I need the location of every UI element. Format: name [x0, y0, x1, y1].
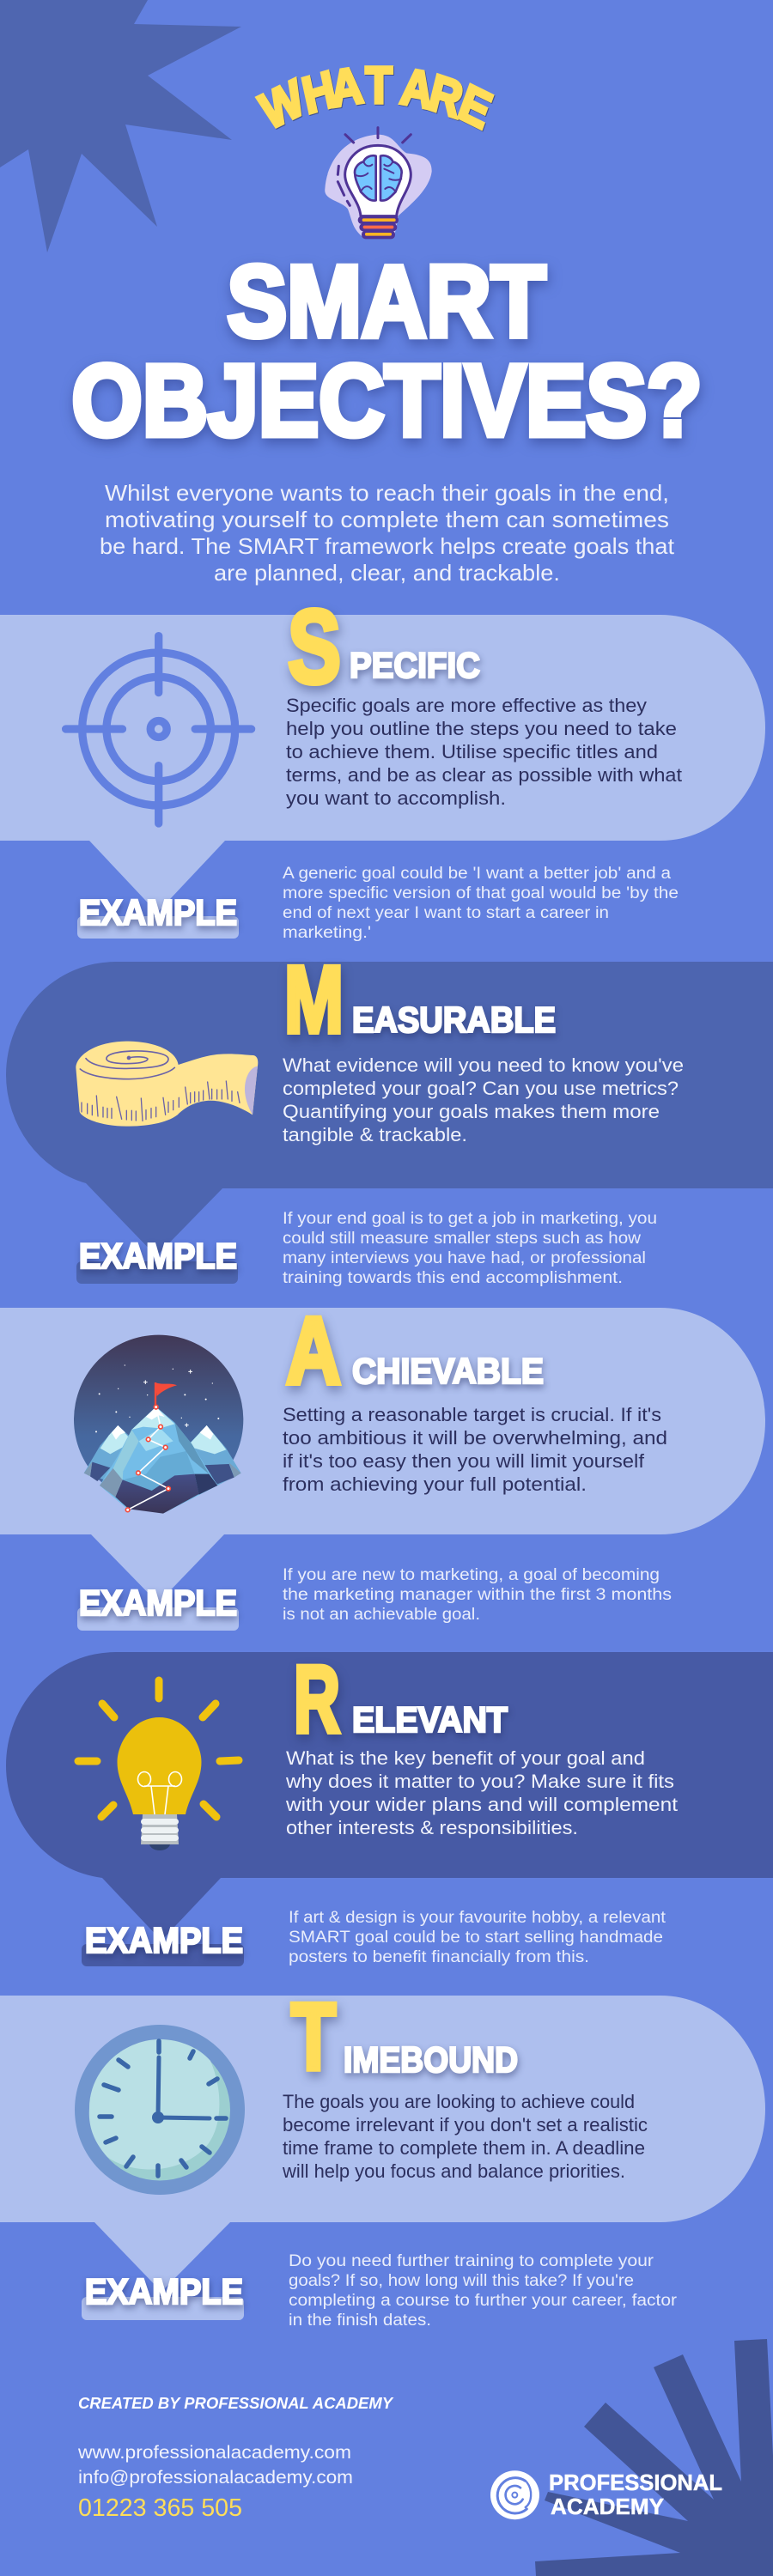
body text: timebound: The goals you are looking to achieve could	[283, 2091, 635, 2112]
speech bubble: timebound	[0, 1996, 765, 2292]
intro paragraph: are planned, clear, and trackable.	[214, 560, 560, 586]
icon: target	[66, 636, 252, 823]
panel: relevant	[6, 1647, 773, 1966]
decorative star top left	[0, 0, 241, 252]
body text: relevant: why does it matter to you? Make sure it fits	[285, 1771, 674, 1792]
example tag: timebound: EXAMPLE	[85, 2271, 243, 2312]
title: achievable: A	[286, 1298, 341, 1404]
example text: achievable: If you are new to marketing, a goal of becoming	[283, 1566, 660, 1584]
title: relevant: ELEVANT	[352, 1699, 508, 1740]
body text: achievable	[283, 1404, 667, 1495]
heading: what are: WHAT ARE	[253, 56, 499, 141]
email: info@professionalacademy.com	[78, 2468, 353, 2488]
panel: achievable	[0, 1298, 765, 1631]
example text: measurable: training towards this end accomplishment.	[283, 1269, 623, 1287]
example text: relevant: posters to benefit financially from this.	[289, 1948, 589, 1966]
title: relevant	[294, 1647, 508, 1753]
intro paragraph: Whilst everyone wants to reach their goals in the end,	[105, 480, 669, 506]
example text: timebound: in the finish dates.	[289, 2312, 431, 2330]
panel: measurable	[6, 947, 773, 1287]
icon: mountain with flag	[74, 1335, 243, 1514]
example text: relevant: SMART goal could be to start selling handmade	[289, 1929, 663, 1947]
intro paragraph: be hard. The SMART framework helps create goals that	[100, 533, 675, 559]
title: measurable: EASURABLE	[352, 999, 556, 1040]
title: relevant: R	[294, 1647, 340, 1753]
body text: timebound	[282, 2091, 648, 2182]
body text: relevant: What is the key benefit of your goal and	[286, 1747, 645, 1769]
example text: measurable	[283, 1210, 657, 1287]
body text: timebound: will help you focus and balance priorities.	[282, 2160, 625, 2182]
logo wordmark	[549, 2470, 722, 2519]
example text: achievable: the marketing manager within the first 3 months	[283, 1586, 672, 1604]
example text: timebound: Do you need further training to complete your	[289, 2252, 654, 2270]
website: www.professionalacademy.com	[77, 2443, 351, 2463]
title: specific	[288, 588, 480, 705]
body text: measurable: Quantifying your goals makes them more	[283, 1101, 660, 1122]
icon: clock	[75, 2025, 245, 2195]
body text: achievable: if it's too easy then you will limit yourself	[283, 1450, 645, 1472]
speech bubble: measurable	[6, 962, 773, 1256]
title: timebound: IMEBOUND	[344, 2039, 518, 2080]
heading: objectives: OBJECTIVES?	[72, 344, 703, 458]
panel: timebound	[0, 1984, 765, 2330]
example tag: specific: EXAMPLE	[79, 892, 237, 933]
example text: measurable: could still measure smaller steps such as how	[283, 1230, 641, 1248]
body text: achievable: too ambitious it will be overwhelming, and	[283, 1427, 667, 1449]
title: measurable	[284, 947, 556, 1053]
panel: specific	[0, 588, 765, 942]
body text: specific: Specific goals are more effective as they	[286, 695, 648, 716]
decorative star bottom right	[535, 2339, 773, 2576]
body text: measurable: tangible & trackable.	[283, 1124, 467, 1145]
example text: relevant	[289, 1909, 666, 1966]
title: timebound: T	[291, 1984, 336, 2090]
icon: tape measure	[76, 1042, 258, 1127]
title: measurable: M	[284, 947, 344, 1053]
example text: specific: more specific version of that goal would be 'by the	[283, 884, 679, 902]
footer contact block	[77, 2394, 394, 2522]
body text: relevant: other interests & responsibilities.	[286, 1817, 578, 1838]
title: specific: PECIFIC	[350, 645, 480, 685]
phone number: 01223 365 505	[78, 2494, 242, 2522]
intro paragraph	[100, 480, 675, 586]
logo mark	[490, 2470, 539, 2519]
logo: professional academy	[490, 2470, 722, 2519]
body text: relevant	[285, 1747, 679, 1838]
intro paragraph: motivating yourself to complete them can sometimes	[105, 507, 669, 532]
example tag: relevant: EXAMPLE	[85, 1920, 243, 1960]
heading: smart: SMART	[227, 246, 546, 359]
example text: specific	[283, 865, 679, 942]
body text: achievable: Setting a reasonable target is crucial. If it's	[283, 1404, 661, 1425]
body text: specific: terms, and be as clear as possible with what	[286, 764, 683, 786]
example text: timebound	[289, 2252, 678, 2330]
example tag: achievable: EXAMPLE	[79, 1583, 237, 1623]
body text: specific: to achieve them. Utilise specific titles and	[286, 741, 658, 762]
example text: measurable: If your end goal is to get a job in marketing, you	[283, 1210, 657, 1228]
example tag: measurable: EXAMPLE	[79, 1236, 237, 1276]
example text: specific: A generic goal could be 'I want a better job' and a	[283, 865, 671, 883]
example text: achievable	[283, 1566, 672, 1624]
example text: timebound: goals? If so, how long will this take? If you're	[289, 2272, 634, 2290]
title: timebound	[291, 1984, 518, 2090]
title: achievable	[286, 1298, 544, 1404]
icon: light bulb	[78, 1680, 239, 1850]
example text: measurable: many interviews you have had, or professional	[283, 1249, 646, 1267]
title: specific: S	[288, 588, 341, 705]
logo wordmark: PROFESSIONAL	[549, 2470, 722, 2495]
body text: timebound: become irrelevant if you don't set a realistic	[283, 2114, 648, 2136]
title: achievable: CHIEVABLE	[352, 1351, 544, 1391]
icon: lightbulb with brain	[325, 128, 432, 239]
body text: specific	[286, 695, 683, 809]
body text: achievable: from achieving your full potential.	[283, 1473, 587, 1495]
example text: specific: marketing.'	[283, 924, 371, 942]
example text: relevant: If art & design is your favourite hobby, a relevant	[289, 1909, 666, 1927]
credit line: CREATED BY PROFESSIONAL ACADEMY	[78, 2394, 394, 2412]
body text: specific: you want to accomplish.	[286, 787, 506, 809]
body text: timebound: time frame to complete them in. A deadline	[283, 2137, 645, 2159]
body text: measurable: completed your goal? Can you use metrics?	[283, 1078, 679, 1099]
example text: achievable: is not an achievable goal.	[283, 1606, 480, 1624]
body text: measurable	[283, 1054, 684, 1145]
example text: timebound: completing a course to further your career, factor	[289, 2292, 678, 2310]
speech bubble: relevant	[6, 1652, 773, 1941]
speech bubble: achievable	[0, 1308, 765, 1603]
body text: measurable: What evidence will you need to know you've	[283, 1054, 684, 1076]
example text: specific: end of next year I want to start a career in	[283, 904, 609, 922]
body text: specific: help you outline the steps you need to take	[286, 718, 677, 739]
speech bubble: specific	[0, 615, 765, 913]
body text: relevant: with your wider plans and will complement	[285, 1794, 679, 1815]
logo wordmark: ACADEMY	[551, 2494, 664, 2519]
